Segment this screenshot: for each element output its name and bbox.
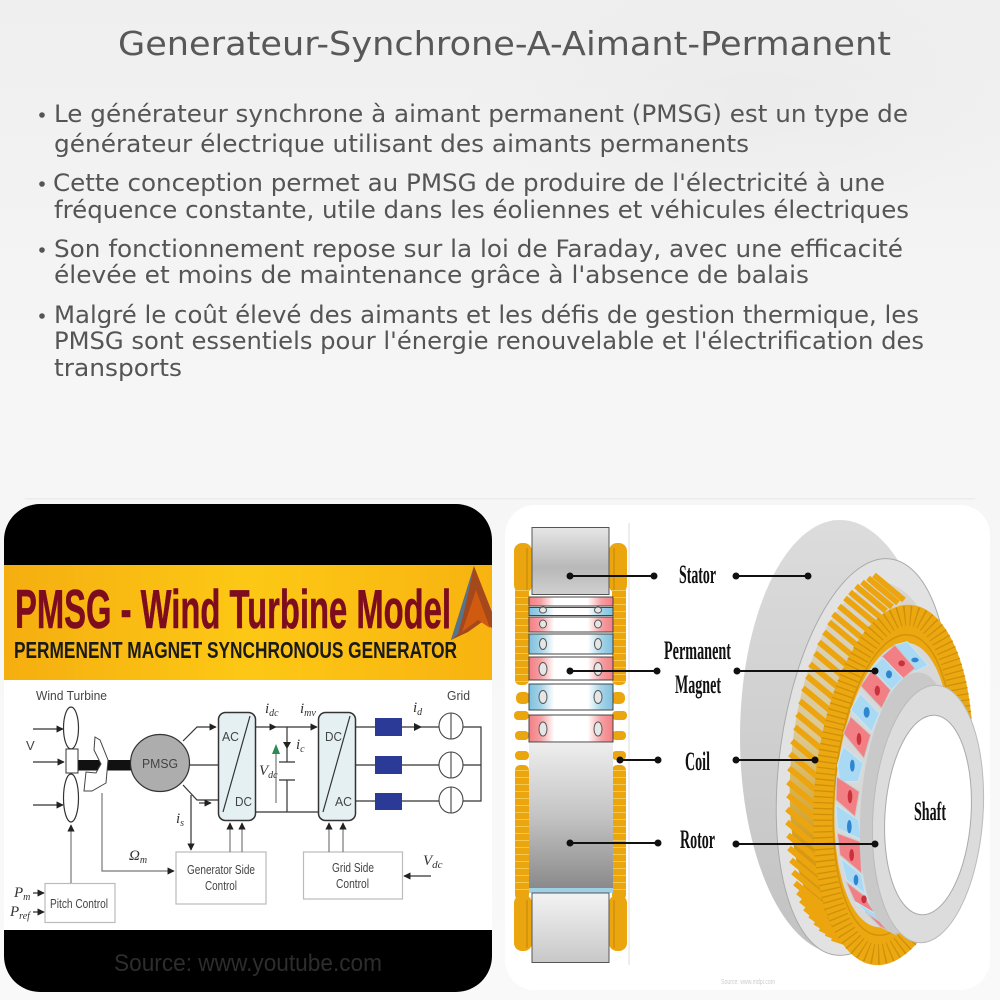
- label: permanent magnet: Magnet: [675, 670, 721, 699]
- icon: matlab membrane: [451, 566, 492, 640]
- pitch control: P: [10, 904, 19, 920]
- source caption: Source: www.youtube.com: [114, 950, 382, 977]
- grid filters and sources: i: [413, 700, 417, 716]
- generator to converter wiring: [176, 727, 218, 850]
- source caption: Source: www.mdpi.com: [721, 979, 775, 986]
- rotor hub: [850, 668, 992, 947]
- generator to converter wiring: i: [176, 811, 180, 827]
- magnet ring: [836, 642, 928, 935]
- DC link: i: [296, 737, 300, 753]
- grid filters and sources: d: [417, 707, 423, 718]
- 3D view: [740, 520, 992, 973]
- DC/AC converter: AC: [335, 794, 352, 809]
- grid filters and sources: [356, 700, 481, 813]
- generator side control: [102, 793, 266, 904]
- bullet 4: Malgré le coût élevé des aimants et les défis de gestion thermique, les: [54, 301, 919, 329]
- AC/DC converter: DC: [235, 794, 252, 809]
- label: stator: Stator: [679, 560, 716, 589]
- label: permanent magnet: [664, 636, 731, 699]
- coils: [514, 543, 627, 951]
- shaft: [878, 712, 978, 918]
- PMSG generator: [130, 734, 190, 792]
- DC link: dc: [268, 770, 278, 781]
- label: rotor: Rotor: [680, 825, 715, 854]
- label: grid: Grid: [447, 688, 470, 703]
- turbine wind arrows: [26, 729, 64, 805]
- grid side control: Control: [336, 876, 369, 891]
- grid side control: Grid Side: [332, 860, 374, 875]
- generator side control: Control: [205, 878, 237, 893]
- DC/AC converter: [318, 712, 356, 820]
- bullet 4: PMSG sont essentiels pour l'énergie renouvelable et l'électrification des: [54, 327, 924, 355]
- rotor: [529, 743, 613, 888]
- AC/DC converter: AC: [222, 729, 239, 744]
- grid side control: [304, 823, 443, 899]
- bullet 3: Son fonctionnement repose sur la loi de Faraday, avec une efficacité: [54, 235, 903, 263]
- bullet 2: [39, 169, 909, 224]
- AC/DC converter: [218, 712, 256, 820]
- cross-section view: [514, 523, 629, 965]
- bullet 3: [39, 235, 903, 289]
- bullet 2: fréquence constante, utile dans les éoliennes et véhicules électriques: [54, 196, 909, 224]
- title: Generateur-Synchrone-A-Aimant-Permanent: [118, 24, 891, 63]
- turbine blades and shaft: [64, 707, 132, 822]
- grid side control: V: [423, 853, 432, 869]
- bullet 1: Le générateur synchrone à aimant permanent (PMSG) est un type de: [54, 100, 908, 128]
- label: coil: Coil: [685, 747, 710, 776]
- DC link: mv: [304, 708, 316, 719]
- bullet 4: transports: [54, 354, 182, 382]
- banner: [4, 565, 492, 680]
- stator teeth: [776, 575, 960, 948]
- text block: bullet points: [39, 100, 924, 382]
- magnets: [529, 597, 613, 742]
- coil windings: [797, 597, 989, 973]
- bullet 2: Cette conception permet au PMSG de produire de l'électricité à une: [53, 169, 885, 197]
- bullet 4: [39, 301, 924, 382]
- label: shaft: Shaft: [914, 797, 946, 826]
- DC link: i: [265, 701, 269, 717]
- banner heading: PMSG - Wind Turbine Model: [15, 578, 451, 640]
- DC link: dc: [269, 708, 279, 719]
- bullet 1: [39, 100, 908, 158]
- panel: PMSG structure: [505, 505, 992, 990]
- callout lines: [568, 574, 878, 846]
- bullet 1: générateur électrique utilisant des aimants permanents: [54, 130, 749, 158]
- generator side control: Ω: [129, 848, 140, 864]
- block diagram: [4, 680, 492, 930]
- bullet 3: élevée et moins de maintenance grâce à l'absence de balais: [54, 261, 809, 289]
- pitch control: Pitch Control: [50, 896, 108, 911]
- stator bottom: [532, 893, 609, 962]
- panel: wind turbine model: [4, 504, 492, 992]
- DC link: V: [259, 763, 268, 779]
- generator side control: Generator Side: [187, 862, 255, 877]
- DC link: [256, 701, 318, 812]
- turbine wind arrows: V: [26, 738, 35, 753]
- label: wind turbine: Wind Turbine: [36, 688, 107, 703]
- banner subheading: PERMENENT MAGNET SYNCHRONOUS GENERATOR: [14, 637, 457, 663]
- pitch control: P: [14, 885, 23, 901]
- DC link: c: [300, 744, 305, 755]
- pitch control: [9, 825, 115, 922]
- DC link: i: [300, 701, 304, 717]
- pitch control: ref: [19, 911, 31, 922]
- generator side control: m: [140, 855, 147, 866]
- label: permanent magnet: Permanent: [664, 636, 731, 665]
- grid side control: dc: [432, 859, 443, 871]
- DC/AC converter: DC: [325, 729, 342, 744]
- generator to converter wiring: s: [180, 818, 184, 829]
- pitch control: m: [23, 892, 30, 903]
- PMSG generator: PMSG: [142, 756, 178, 771]
- stator top: [532, 528, 609, 594]
- stator shell: [740, 520, 973, 967]
